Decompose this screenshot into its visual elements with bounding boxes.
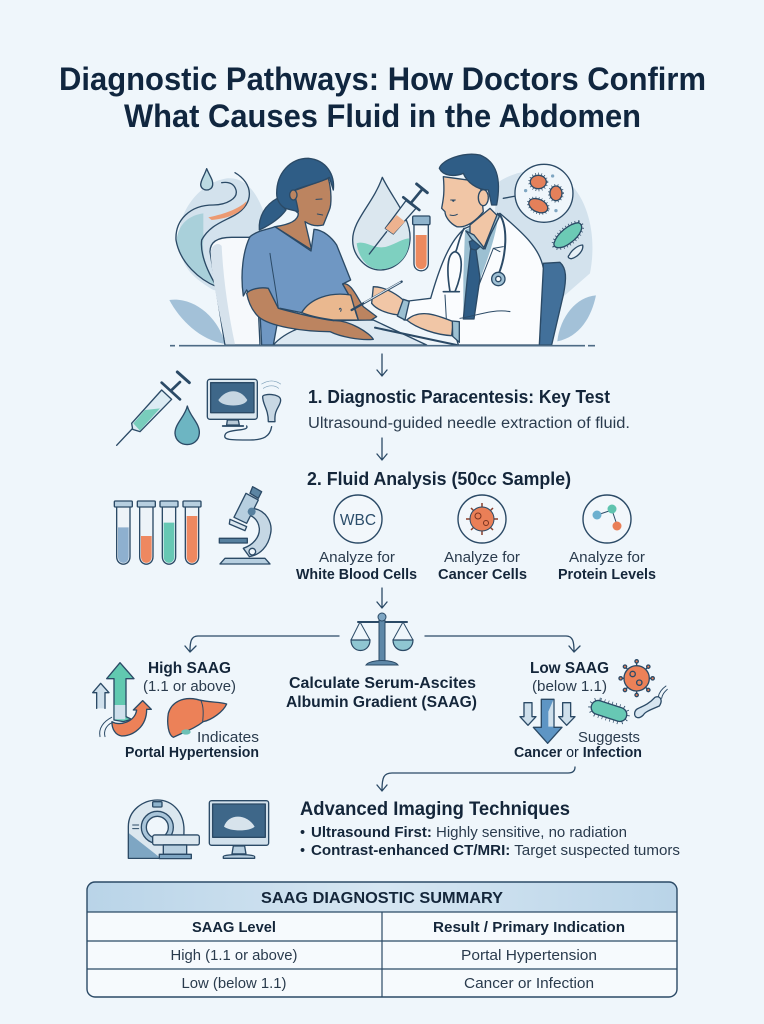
step 1 description: Ultrasound-guided needle extraction of fluid.: [308, 415, 630, 432]
panel: high SAAG: Portal Hypertension: [125, 745, 259, 761]
icon: green bacterium: [589, 699, 629, 723]
analysis item: white blood cells: Analyze for: [319, 550, 395, 566]
analysis item: protein levels: Analyze for: [569, 550, 645, 566]
panel: high SAAG: (1.1 or above): [143, 678, 236, 695]
arrow: to high SAAG: [185, 636, 339, 652]
icon: four test tubes: [114, 501, 201, 564]
doctor's hand and instrument: [352, 282, 409, 320]
analysis item: protein levels: [558, 495, 656, 583]
step 1 heading: 1. Diagnostic Paracentesis: Key Test: [308, 387, 610, 407]
panel: advanced imaging techniques: •: [300, 825, 305, 841]
panel: advanced imaging techniques: •: [300, 843, 305, 859]
text: calculate SAAG: [286, 675, 477, 711]
analysis item: white blood cells: [296, 495, 417, 583]
fluid droplet with syringe: [353, 177, 427, 270]
panel: low SAAG: (below 1.1): [532, 678, 607, 695]
step 2 heading: 2. Fluid Analysis (50cc Sample): [307, 469, 571, 489]
panel: advanced imaging techniques: Ultrasound First: Highly sensitive, no radiation: [311, 825, 627, 841]
test tube: [413, 216, 430, 271]
table: SAAG diagnostic summary: Result / Primary Indication: [433, 919, 625, 936]
arrow: to low SAAG: [425, 636, 580, 652]
icon: microscope: [219, 487, 271, 564]
hero illustration: doctor performing paracentesis on patient: [169, 154, 596, 346]
analysis item: white blood cells: White Blood Cells: [296, 567, 417, 583]
panel: low SAAG: [514, 660, 667, 761]
background and left-side elements: [169, 169, 596, 345]
icon: upward arrows: [93, 663, 151, 737]
icon: ultrasound machine: [207, 379, 281, 440]
panel: low SAAG: Low SAAG: [530, 660, 609, 677]
arrow: [377, 354, 387, 376]
analysis item: protein levels: Protein Levels: [558, 567, 656, 583]
green bacterium: [554, 223, 583, 259]
patient: [242, 158, 427, 345]
analysis item: cancer cells: Analyze for: [444, 550, 520, 566]
icon: liver: [168, 699, 227, 737]
title: [59, 61, 706, 134]
microscope view of bacteria: [503, 164, 573, 222]
table: SAAG diagnostic summary: SAAG Level: [192, 919, 276, 936]
icon: cancer cell: [458, 495, 506, 543]
panel: high SAAG: High SAAG: [148, 660, 231, 677]
arrow: [377, 588, 387, 608]
icon: imaging monitor: [209, 801, 269, 858]
table: SAAG diagnostic summary: SAAG DIAGNOSTIC SUMMARY: [261, 890, 503, 907]
table: SAAG diagnostic summary: Cancer or Infection: [464, 975, 594, 992]
text: calculate SAAG: Calculate Serum-Ascites: [289, 675, 476, 692]
icon: syringe and droplet: [117, 372, 199, 445]
panel: advanced imaging techniques: [300, 799, 680, 859]
icon: pale bacterium: [635, 686, 667, 718]
table: SAAG diagnostic summary: [87, 882, 677, 997]
arrow: to imaging: [377, 767, 575, 791]
icon: virus: [619, 660, 654, 697]
text: calculate SAAG: Albumin Gradient (SAAG): [286, 694, 477, 711]
icon: protein molecule: [583, 495, 631, 543]
table: SAAG diagnostic summary: High (1.1 or above): [170, 947, 298, 964]
panel: low SAAG: Suggests: [578, 730, 640, 746]
arrow: [377, 438, 387, 460]
panel: high SAAG: Indicates: [197, 730, 259, 746]
ground line: [170, 345, 595, 347]
title: What Causes Fluid in the Abdomen: [124, 98, 641, 134]
panel: advanced imaging techniques: Contrast-enhanced CT/MRI: Target suspected tumors: [311, 843, 680, 859]
doctor: [375, 154, 566, 345]
table: SAAG diagnostic summary: Low (below 1.1): [182, 975, 287, 992]
panel: advanced imaging techniques: Advanced Imaging Techniques: [300, 799, 570, 820]
panel: high SAAG: [93, 660, 259, 761]
analysis item: cancer cells: [438, 495, 527, 583]
icon: WBC circle: WBC: [340, 512, 376, 529]
title: Diagnostic Pathways: How Doctors Confirm: [59, 61, 706, 97]
icon: balance scale: [351, 613, 413, 665]
text: cancer or infection: Cancer or Infection: [514, 745, 642, 761]
analysis item: cancer cells: Cancer Cells: [438, 567, 527, 583]
icon: CT scanner: [128, 800, 199, 859]
table: SAAG diagnostic summary: Portal Hypertension: [461, 947, 597, 964]
icon: downward arrows: [520, 699, 575, 743]
